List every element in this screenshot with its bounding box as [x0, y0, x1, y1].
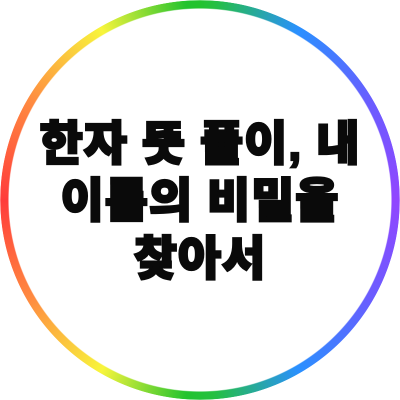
title line 1: 한자 뜻 풀이, 내 [40, 117, 360, 170]
title line 2: 이름의 비밀을 [61, 174, 339, 227]
title line 3: 찾아서 [134, 232, 266, 285]
